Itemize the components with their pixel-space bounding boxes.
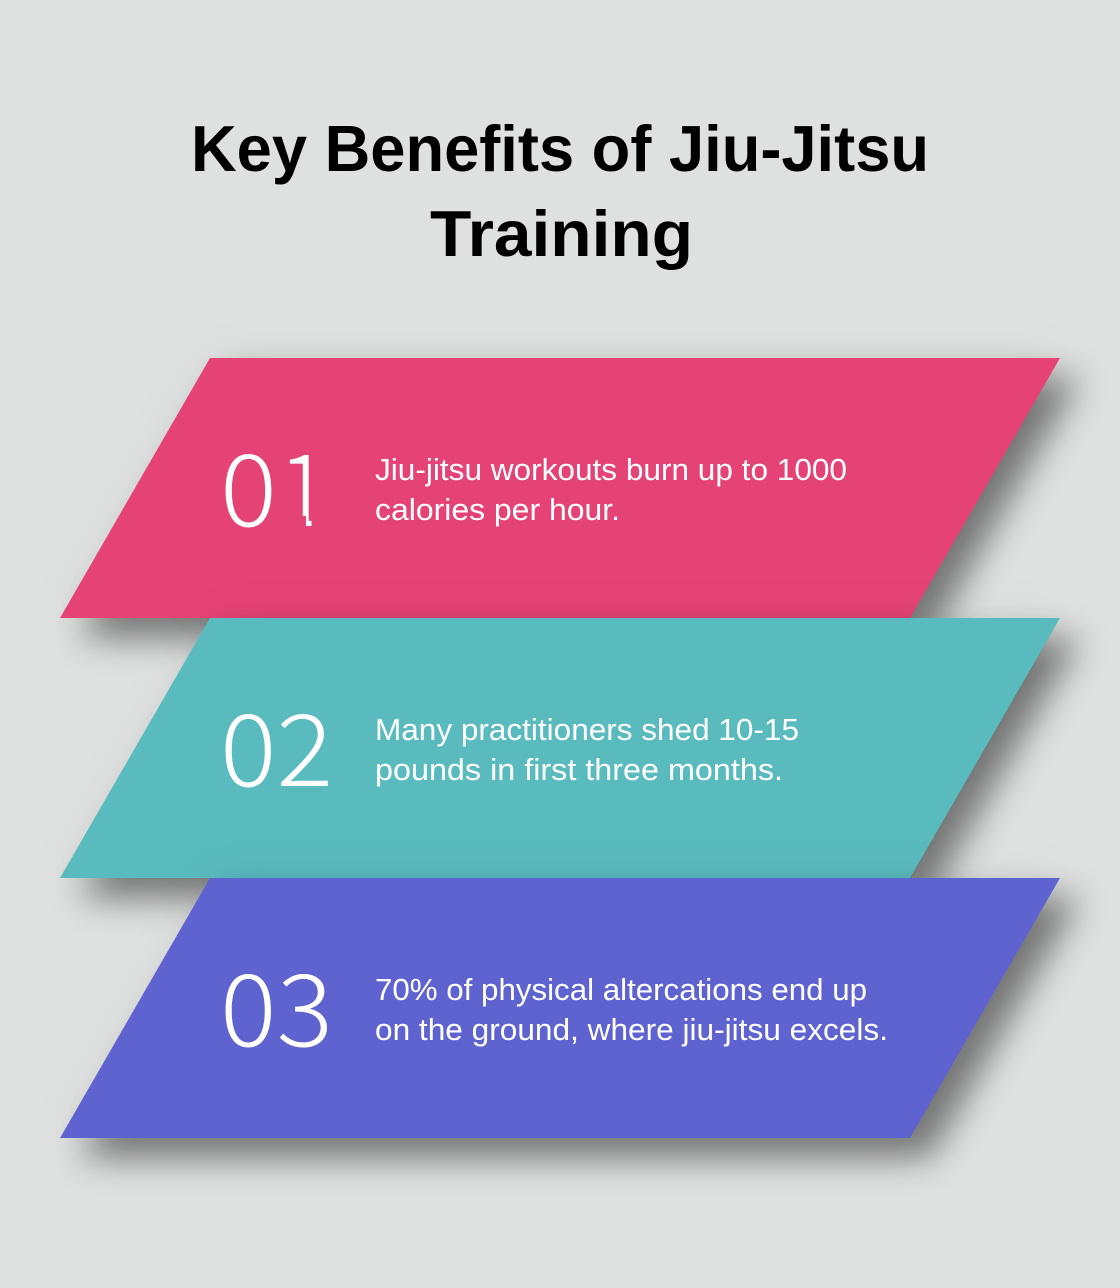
title (191, 112, 929, 270)
text: calories: Jiu-jitsu workouts burn up to 1000 (375, 452, 847, 487)
number 02: 02 (220, 670, 333, 815)
text: altercations (375, 972, 888, 1047)
number 01: 0 (220, 410, 277, 555)
panel: benefit 01 (60, 358, 1060, 618)
parallelogram: pink (60, 358, 1060, 618)
text: altercations: on the ground, where jiu-jitsu excels. (375, 1012, 888, 1047)
text: pounds: pounds in first three months. (375, 752, 783, 787)
text: calories: calories per hour. (375, 492, 620, 527)
number 03: 03 (220, 930, 333, 1075)
text: pounds: Many practitioners shed 10-15 (375, 712, 799, 747)
title: Key Benefits of Jiu-Jitsu (191, 112, 929, 185)
text: pounds (375, 712, 799, 787)
panel: benefit 02 (60, 618, 1060, 878)
number 01: 1 (277, 410, 330, 555)
title: Training (430, 197, 693, 270)
parallelogram: teal (60, 618, 1060, 878)
parallelogram: indigo (60, 878, 1060, 1138)
number 01 (226, 454, 312, 528)
panel: benefit 03 (60, 878, 1060, 1138)
text: altercations: 70% of physical altercations end up (375, 972, 867, 1007)
text: calories (375, 452, 847, 527)
